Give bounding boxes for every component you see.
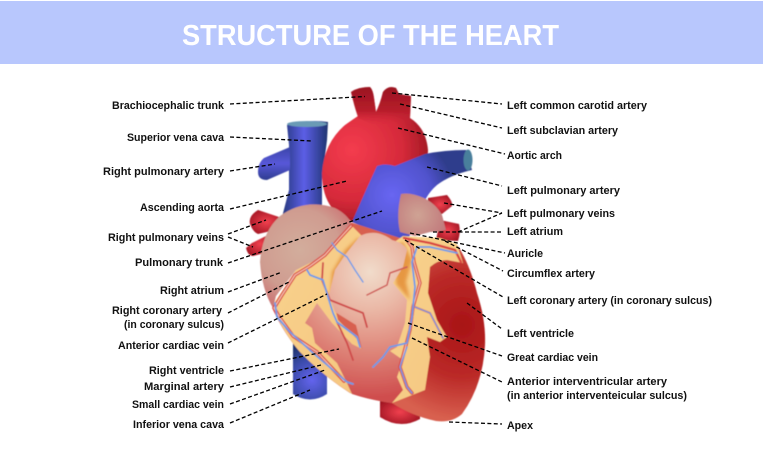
label: superior vena cava: Superior vena cava xyxy=(127,132,225,144)
label: auricle: Auricle xyxy=(507,248,543,260)
label: anterior cardiac vein: Anterior cardiac vein xyxy=(118,340,224,352)
label: left pulmonary veins: Left pulmonary veins xyxy=(507,208,615,220)
right labels xyxy=(507,100,712,432)
descending aorta at base xyxy=(380,400,420,424)
right pulmonary artery xyxy=(258,147,290,180)
superior vena cava xyxy=(280,121,328,225)
circumflex artery xyxy=(404,238,461,262)
left atrium auricle xyxy=(398,194,446,236)
label: small cardiac vein: Small cardiac vein xyxy=(132,399,224,411)
fat right xyxy=(384,236,463,403)
great artery xyxy=(400,240,420,393)
label: apex: Apex xyxy=(507,420,534,432)
left labels xyxy=(103,100,225,431)
label: left ventricle: Left ventricle xyxy=(507,328,574,340)
anterior branch artery xyxy=(322,263,367,360)
fat left xyxy=(272,224,364,394)
label: in anterior interventricular sulcus: (in anterior interventeicular sulcus) xyxy=(507,390,687,402)
left anterior branch xyxy=(415,307,443,338)
aortic branches shade xyxy=(351,87,412,126)
heart illustration xyxy=(246,87,485,424)
right pulmonary veins xyxy=(246,210,284,256)
label: great cardiac vein: Great cardiac vein xyxy=(507,352,598,364)
label: anterior interventricular artery: Anterior interventricular artery xyxy=(507,376,668,388)
title: STRUCTURE OF THE HEART xyxy=(182,20,559,52)
label: left common carotid artery: Left common carotid artery xyxy=(507,100,648,112)
label: right atrium: Right atrium xyxy=(160,285,224,297)
label: marginal artery: Marginal artery xyxy=(144,381,225,393)
title banner xyxy=(0,1,763,64)
vena cava opening xyxy=(287,121,327,127)
pulmonary trunk xyxy=(352,150,472,245)
label: brachiocephalic trunk: Brachiocephalic trunk xyxy=(112,100,225,112)
left ventricle xyxy=(273,222,485,421)
label: right pulmonary artery: Right pulmonary artery xyxy=(103,166,225,178)
label: right ventricle: Right ventricle xyxy=(149,365,224,377)
leader lines xyxy=(228,93,505,424)
label: circumflex artery: Circumflex artery xyxy=(507,268,596,280)
label: pulmonary trunk: Pulmonary trunk xyxy=(135,257,224,269)
central arterial branch xyxy=(367,267,407,295)
right coronary artery xyxy=(274,226,351,381)
right atrium xyxy=(260,204,352,308)
orange shading xyxy=(330,238,412,312)
myocardium centre xyxy=(305,233,407,403)
label: left coronary artery: Left coronary artery (in coronary sulcus) xyxy=(507,295,712,307)
label: in coronary sulcus: (in coronary sulcus) xyxy=(124,319,224,331)
coronary arteries xyxy=(274,226,461,393)
aorta xyxy=(322,87,428,230)
label: right pulmonary veins: Right pulmonary veins xyxy=(108,232,224,244)
label: left pulmonary artery: Left pulmonary artery xyxy=(507,185,621,197)
cardiac veins xyxy=(275,243,457,393)
left pulmonary veins xyxy=(428,195,460,241)
inferior vena cava xyxy=(293,315,327,400)
pulmonary artery opening xyxy=(464,150,472,170)
label: ascending aorta: Ascending aorta xyxy=(140,202,225,214)
label: right coronary artery: Right coronary artery xyxy=(112,305,223,317)
label: inferior vena cava: Inferior vena cava xyxy=(133,419,225,431)
label: left subclavian artery: Left subclavian artery xyxy=(507,125,619,137)
label: left atrium: Left atrium xyxy=(507,226,563,238)
label: aortic arch: Aortic arch xyxy=(507,150,562,162)
